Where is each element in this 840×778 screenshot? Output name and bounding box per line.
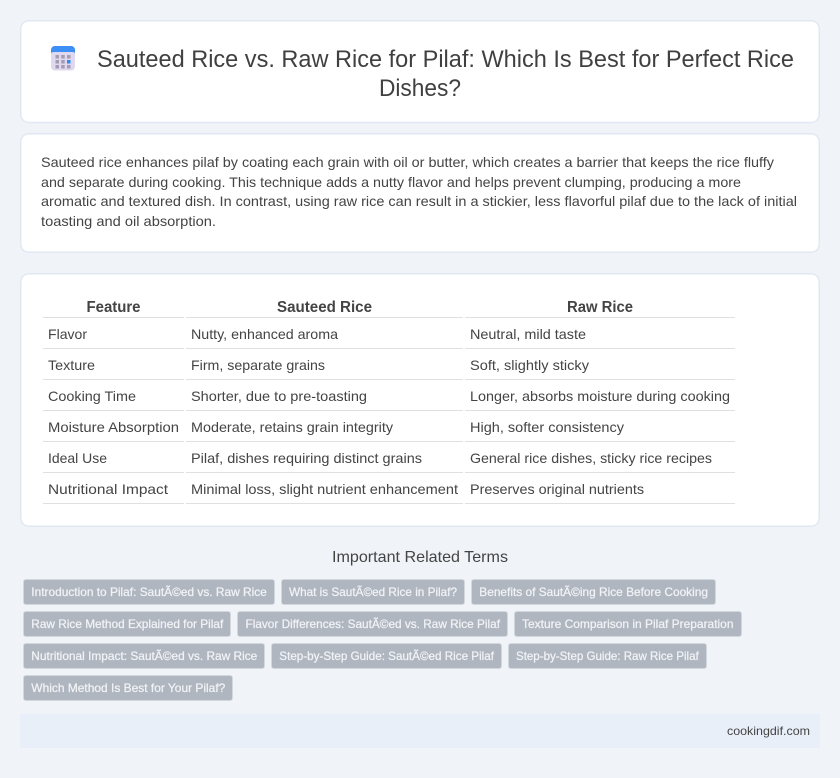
tag (272, 644, 502, 668)
panel: intro paragraph (21, 134, 819, 252)
title: Dishes? (379, 75, 461, 102)
table row: Flavor (48, 326, 586, 342)
table row: Ideal Use: Ideal Use (48, 450, 107, 466)
tag (24, 644, 264, 668)
table row: Flavor: Nutty, enhanced aroma (191, 326, 338, 342)
table row: Nutritional Impact (48, 481, 644, 497)
table row: Flavor: Neutral, mild taste (470, 326, 586, 342)
table header: Feature (86, 299, 141, 316)
table header: Raw Rice (567, 299, 633, 316)
tag: Step-by-Step Guide: Raw Rice Pilaf (516, 649, 699, 663)
table header (86, 299, 633, 316)
text block: description (41, 154, 797, 229)
table row: Nutritional Impact: Minimal loss, slight nutrient enhancement (191, 481, 458, 497)
table row: Cooking Time: Cooking Time (48, 388, 136, 404)
table row: Texture: Texture (48, 357, 95, 373)
tag (472, 580, 716, 604)
tag: Benefits of SautÃ©ing Rice Before Cooking (479, 585, 708, 599)
table row: Moisture Absorption (48, 419, 624, 435)
table row: Nutritional Impact: Nutritional Impact (48, 481, 168, 497)
table row: Texture: Soft, slightly sticky (470, 357, 589, 373)
tag (514, 612, 742, 636)
footer: cookingdif.com (727, 724, 810, 738)
footer (20, 714, 820, 748)
table row: Nutritional Impact: Preserves original nutrients (470, 481, 644, 497)
tag: What is SautÃ©ed Rice in Pilaf? (289, 585, 457, 599)
tag (508, 644, 706, 668)
tag: Nutritional Impact: SautÃ©ed vs. Raw Rice (31, 649, 258, 663)
panel: comparison table (21, 274, 819, 526)
table row: Flavor: Flavor (48, 326, 87, 342)
table row: Ideal Use: Pilaf, dishes requiring distinct grains (191, 450, 422, 466)
tag: Step-by-Step Guide: SautÃ©ed Rice Pilaf (279, 649, 495, 663)
panel: title header (21, 21, 819, 122)
table row: Cooking Time: Shorter, due to pre-toasting (191, 388, 367, 404)
table row: Cooking Time: Longer, absorbs moisture during cooking (470, 388, 730, 404)
tag: Flavor Differences: SautÃ©ed vs. Raw Rice Pilaf (246, 617, 501, 631)
tag: Introduction to Pilaf: SautÃ©ed vs. Raw Rice (31, 585, 267, 599)
tag (24, 676, 232, 700)
table row: Moisture Absorption: Moderate, retains grain integrity (191, 419, 393, 435)
tag (24, 612, 230, 636)
table row: Moisture Absorption: High, softer consistency (470, 419, 624, 435)
tag: Which Method Is Best for Your Pilaf? (31, 681, 226, 695)
title: Sauteed Rice vs. Raw Rice for Pilaf: Which Is Best for Perfect Rice (97, 46, 794, 73)
tag: Raw Rice Method Explained for Pilaf (31, 617, 224, 631)
table header: Sauteed Rice (277, 299, 372, 316)
table row: Cooking Time (48, 388, 730, 404)
heading: related terms: Important Related Terms (332, 549, 508, 566)
tag (24, 580, 274, 604)
tag (238, 612, 508, 636)
tag: Texture Comparison in Pilaf Preparation (522, 617, 734, 631)
tag (282, 580, 464, 604)
table row: Moisture Absorption: Moisture Absorption (48, 419, 179, 435)
title (97, 46, 794, 102)
panel: related term tags (24, 580, 742, 700)
text block: description: and separate during cooking. This technique adds a nutty flavor and helps prevent clumping, producing a more (41, 174, 741, 190)
text block: description: aromatic and textured dish. In contrast, using raw rice can result in a stickier, less flavorful pilaf due to the lack of initial (41, 193, 797, 209)
table row: Texture: Firm, separate grains (191, 357, 325, 373)
icon: abacus calendar (51, 46, 75, 70)
text block: description: toasting and oil absorption. (41, 213, 216, 229)
text block: description: Sauteed rice enhances pilaf by coating each grain with oil or butter, which creates a barrier that keeps the rice fluffy (41, 154, 774, 170)
table row: Ideal Use: General rice dishes, sticky rice recipes (470, 450, 712, 466)
table row: Ideal Use (48, 450, 712, 466)
table row: Texture (48, 357, 589, 373)
